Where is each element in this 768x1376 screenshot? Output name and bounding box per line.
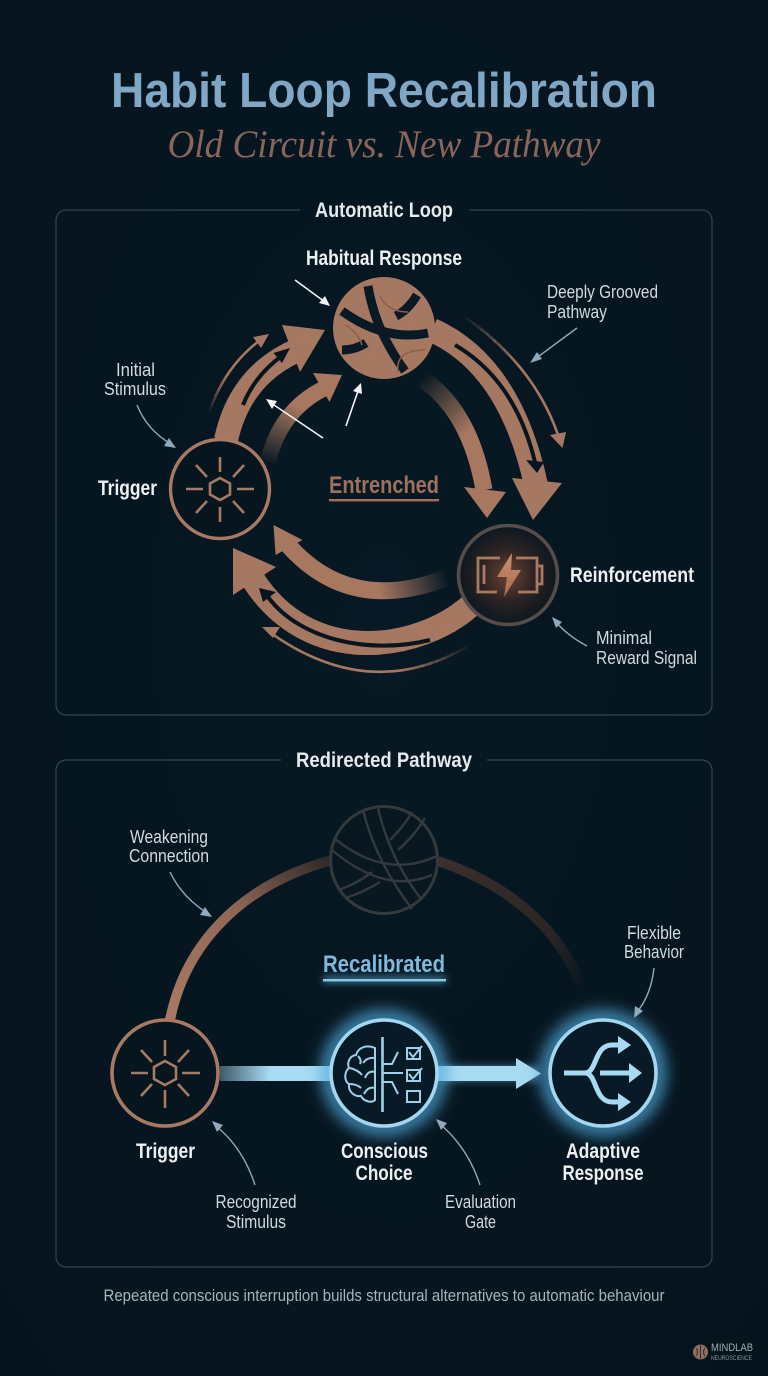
arrow: trigger to habitual response bundle xyxy=(209,325,325,440)
groove: left arrow xyxy=(243,348,290,405)
logo: mindlab neuroscience: NEUROSCIENCE xyxy=(711,1355,753,1362)
center label: entrenched: Entrenched xyxy=(329,472,439,499)
annotation: recognized stimulus: Recognized xyxy=(216,1192,296,1212)
annotation: deeply grooved pathway: Deeply Grooved xyxy=(547,282,658,302)
panel heading: Redirected Pathway xyxy=(296,749,472,772)
subtitle: Old Circuit vs. New Pathway xyxy=(168,123,601,166)
annotation: flexible behavior: Behavior xyxy=(624,942,684,962)
label: conscious choice: Conscious xyxy=(341,1140,428,1163)
label: trigger: Trigger xyxy=(136,1140,195,1163)
label: conscious choice: Choice xyxy=(356,1162,412,1185)
icon: trigger node xyxy=(170,440,270,538)
panel: redirected pathway xyxy=(56,749,712,1267)
label: trigger: Trigger xyxy=(98,477,157,500)
annotation: flexible behavior xyxy=(624,923,684,1018)
annotation: minimal reward signal: Reward Signal xyxy=(596,648,697,668)
annotation: evaluation gate: Evaluation xyxy=(445,1192,516,1212)
label: adaptive response: Response xyxy=(562,1162,644,1185)
center label: recalibrated: Recalibrated xyxy=(323,951,445,978)
panel frame xyxy=(56,760,712,1267)
label: adaptive response: Adaptive xyxy=(566,1140,640,1163)
groove: lower arrow xyxy=(259,588,430,646)
groove: right arrow xyxy=(455,345,544,473)
annotation: initial stimulus xyxy=(104,360,176,448)
arrow: reinforcement to trigger bundle xyxy=(233,548,470,672)
annotation: evaluation gate: Gate xyxy=(465,1212,496,1232)
annotation: deeply grooved pathway: Pathway xyxy=(547,302,607,322)
annotation: recognized stimulus xyxy=(212,1121,296,1232)
panel: automatic loop xyxy=(56,199,712,715)
logo: mindlab neuroscience: MINDLAB xyxy=(711,1342,753,1354)
arrow: inner habitual to reinforcement xyxy=(421,378,506,518)
arrow: inner reinforcement to trigger xyxy=(274,525,446,591)
annotation: minimal reward signal xyxy=(552,617,697,668)
title: Habit Loop Recalibration xyxy=(111,64,657,118)
annotation: weakening connection: Connection xyxy=(129,846,209,866)
annotation: weakening connection xyxy=(129,827,212,917)
icon: trigger node xyxy=(112,1020,218,1126)
label: reinforcement: Reinforcement xyxy=(570,564,694,587)
icon: habitual response node xyxy=(333,277,435,379)
icon: reinforcement node xyxy=(458,526,558,624)
annotation: weakening connection: Weakening xyxy=(130,827,208,847)
icon: conscious choice node xyxy=(329,1018,439,1128)
annotation: flexible behavior: Flexible xyxy=(627,923,681,943)
footer note: Repeated conscious interruption builds structural alternatives to automatic behaviour xyxy=(104,1287,665,1305)
arrow: habitual response to reinforcement bundle xyxy=(432,315,566,520)
panel heading: Automatic Loop xyxy=(315,199,453,222)
label: adaptive response xyxy=(562,1140,644,1185)
logo: mindlab neuroscience xyxy=(693,1342,753,1362)
annotation: minimal reward signal: Minimal xyxy=(596,628,652,648)
arrow: inner trigger to habitual xyxy=(268,373,342,462)
annotation: deeply grooved pathway xyxy=(530,282,658,363)
white pointer arrows xyxy=(266,280,362,438)
annotation: recognized stimulus: Stimulus xyxy=(226,1212,286,1232)
annotation: initial stimulus: Stimulus xyxy=(104,379,166,399)
label: conscious choice xyxy=(341,1140,428,1185)
label: habitual response: Habitual Response xyxy=(306,247,462,270)
glow: arrow to adaptive response xyxy=(439,1066,539,1081)
icon: faded habitual node xyxy=(330,806,438,914)
panel frame xyxy=(56,210,712,715)
icon: adaptive response node xyxy=(548,1018,658,1128)
arrow: conscious choice to adaptive response xyxy=(437,1058,541,1089)
arc: weakening connection xyxy=(170,860,580,1020)
annotation: initial stimulus: Initial xyxy=(116,360,155,380)
annotation: evaluation gate xyxy=(436,1119,516,1232)
arrow: trigger to conscious choice xyxy=(220,1066,332,1081)
